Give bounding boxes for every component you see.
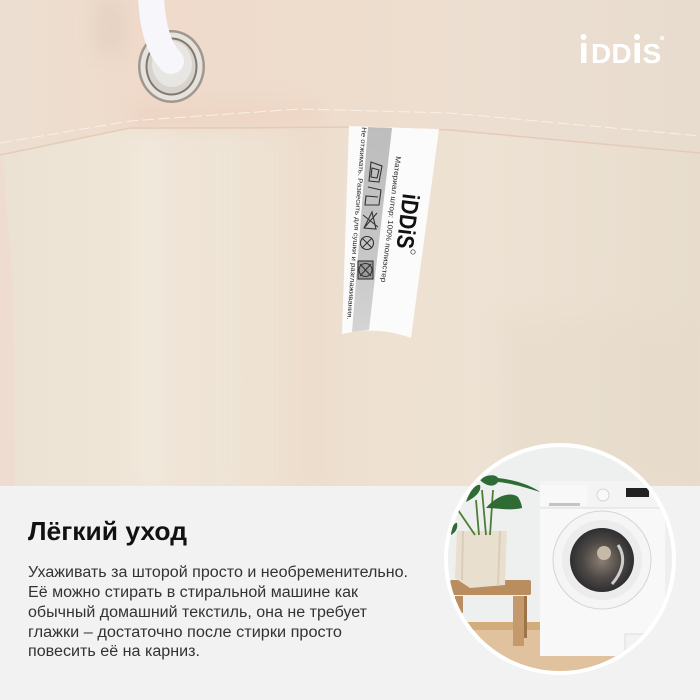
stool bbox=[450, 580, 531, 646]
label logo: iDDiS bbox=[391, 192, 424, 250]
logo: iddis white: i bbox=[580, 38, 588, 69]
body text: повесить её на карниз. bbox=[28, 643, 200, 660]
icon: no bleach bbox=[363, 212, 378, 229]
care icons bbox=[358, 162, 382, 279]
washing machine body bbox=[540, 508, 665, 656]
body text: глажки – достаточно после стирки просто bbox=[28, 624, 342, 641]
icon: iron bbox=[365, 187, 381, 205]
curtain lower folds bbox=[135, 130, 700, 490]
panel: curtain photo bbox=[0, 0, 700, 490]
icon: no tumble dry bbox=[360, 236, 374, 250]
floor bbox=[474, 630, 646, 671]
body text: обычный домашний текстиль, она не требует bbox=[28, 604, 367, 621]
heading: Лёгкий уход bbox=[28, 516, 187, 546]
icon: metal grommet with white ring bbox=[138, 0, 205, 103]
panel: bottom text area bbox=[0, 486, 700, 700]
plant bbox=[451, 475, 540, 535]
label registered mark bbox=[411, 250, 415, 254]
tote bag bbox=[455, 531, 507, 588]
logo: iddis white bbox=[580, 34, 664, 69]
label material text: Материал штор: 100% полиэстер bbox=[379, 156, 403, 283]
label care text: Не отжимать. Развесить для сушки и разглаживания. bbox=[345, 127, 367, 320]
care label bbox=[342, 126, 439, 338]
door bbox=[553, 511, 651, 609]
inset photo: washing machine bbox=[440, 440, 680, 680]
icon: no dry clean bbox=[358, 261, 373, 279]
logo: iddis white: i bbox=[633, 38, 641, 69]
body text: Ухаживать за шторой просто и необременительно. bbox=[28, 564, 408, 581]
curtain side hem bbox=[0, 155, 15, 486]
body text bbox=[28, 564, 408, 660]
curtain top hem bbox=[0, 0, 700, 155]
hem shading bbox=[95, 0, 320, 124]
body text: Её можно стирать в стиральной машине как bbox=[28, 584, 358, 601]
icon: wash 30 bbox=[369, 162, 382, 182]
grey band bbox=[352, 127, 392, 332]
logo: iddis white: D bbox=[612, 38, 632, 69]
logo: iddis white: S bbox=[642, 38, 661, 69]
logo: iddis white: D bbox=[591, 38, 611, 69]
